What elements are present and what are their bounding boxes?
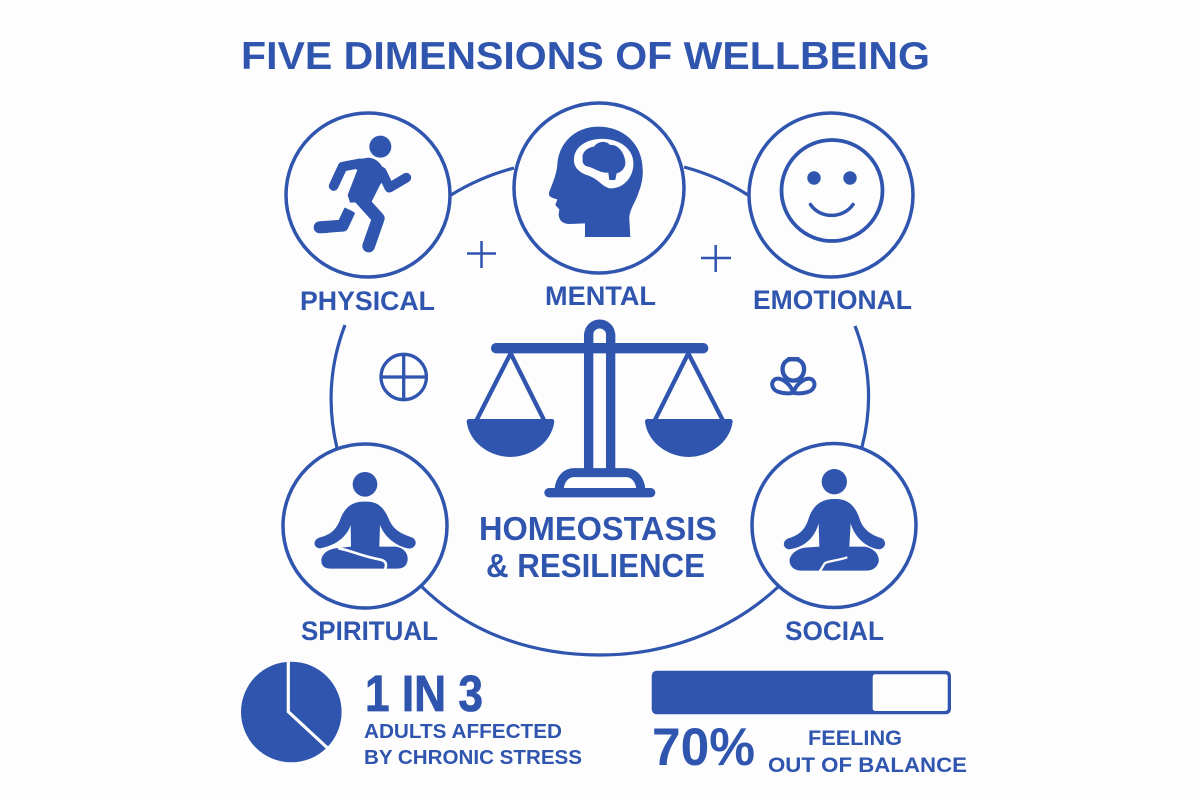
emotional label: EMOTIONAL: [753, 285, 912, 315]
panel: physical: [286, 113, 450, 316]
mental circle: [514, 103, 684, 273]
central label: homeostasis and resilience: HOMEOSTASIS: [479, 510, 717, 547]
central label: homeostasis and resilience: & RESILIENCE: [486, 547, 705, 584]
decorative plus left: [467, 241, 496, 268]
panel: spiritual: [283, 444, 447, 646]
stat: 70%: 70%: [652, 718, 755, 777]
stat caption: [364, 720, 582, 769]
panel: emotional: [749, 113, 913, 315]
social circle: [752, 444, 916, 608]
stat caption: FEELING: [808, 727, 902, 750]
physical circle: [286, 113, 450, 277]
emotional circle: [749, 113, 913, 277]
central label: homeostasis and resilience: [479, 510, 717, 584]
panel: out of balance statistic: [652, 671, 967, 777]
physical label: PHYSICAL: [300, 286, 435, 316]
panel: chronic stress statistic: [241, 660, 582, 769]
icon: circled cross: [381, 354, 426, 400]
decorative plus right: [701, 245, 731, 272]
icon: seated figure: [784, 469, 885, 572]
stat caption: OUT OF BALANCE: [768, 754, 967, 777]
icon: runner: [320, 136, 406, 246]
icon: head with brain: [549, 127, 643, 237]
icon: balance scales: [467, 324, 733, 497]
icon: small lotus: [772, 359, 814, 393]
stat caption: BY CHRONIC STRESS: [364, 746, 582, 769]
stat caption: ADULTS AFFECTED: [364, 720, 562, 743]
ring connecting the five dimensions: [331, 167, 869, 655]
stat caption: [768, 727, 967, 777]
panel: mental: [514, 103, 684, 311]
pie chart: [241, 660, 342, 762]
icon: smiley face: [782, 140, 882, 241]
stat: 1 in 3: 1 IN 3: [365, 665, 483, 722]
spiritual circle: [283, 444, 447, 608]
progress bar: [652, 671, 951, 714]
spiritual label: SPIRITUAL: [301, 616, 438, 646]
title: FIVE DIMENSIONS OF WELLBEING: [241, 35, 930, 78]
social label: SOCIAL: [785, 616, 884, 646]
panel: social: [752, 444, 916, 646]
icon: meditating figure: [314, 472, 416, 570]
mental label: MENTAL: [545, 281, 656, 311]
